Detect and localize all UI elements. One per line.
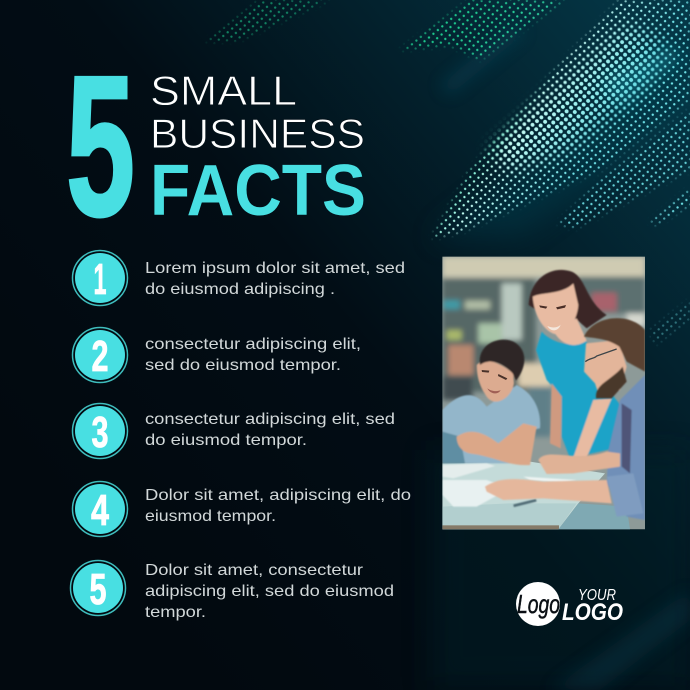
fact 3: do eiusmod tempor.	[145, 432, 307, 449]
office backdrop	[442, 257, 645, 529]
papers and laptop	[443, 463, 577, 507]
glasses	[585, 349, 617, 362]
fact 3	[72, 404, 395, 458]
fact 1: Lorem ipsum dolor sit amet, sed	[145, 260, 405, 277]
logo: LOGO	[562, 599, 623, 626]
woman's face details	[539, 305, 566, 330]
fact 4	[72, 482, 411, 536]
title	[66, 35, 366, 258]
fact 5: Dolor sit amet, consectetur	[145, 562, 364, 579]
halftone dot pattern	[205, 0, 690, 346]
fact 3: 3	[92, 408, 108, 457]
fact 5: 5	[90, 565, 106, 614]
heading: small business: SMALL	[150, 67, 297, 114]
fact 2	[72, 328, 361, 382]
title: BUSINESS	[150, 110, 365, 157]
fact 2: 2	[92, 332, 108, 381]
logo	[516, 582, 623, 626]
left man's face details	[482, 370, 507, 393]
logo badge	[516, 582, 560, 626]
fact 4: Dolor sit amet, adipiscing elit, do	[145, 487, 411, 504]
fact 2: consectetur adipiscing elit,	[145, 336, 361, 353]
table	[442, 462, 605, 529]
big numeral 5: 5	[66, 35, 135, 258]
fact 1: do eiusmod adipiscing .	[145, 281, 335, 298]
woman in blue	[529, 270, 622, 458]
photo: three colleagues at a table	[442, 257, 645, 529]
fact 3: consectetur adipiscing elit, sed	[145, 411, 395, 428]
fact 4: eiusmod tempor.	[145, 508, 276, 525]
fact 4: 4	[91, 486, 109, 535]
logo wordmark: YOUR	[578, 587, 616, 604]
fact 5: tempor.	[145, 604, 206, 621]
fact 1	[72, 250, 405, 306]
fact 2: sed do eiusmod tempor.	[145, 357, 341, 374]
man in grey-blue tee	[442, 340, 540, 465]
fact 5: adipiscing elit, sed do eiusmod	[145, 583, 394, 600]
man with glasses	[485, 318, 645, 520]
fact 5	[70, 560, 394, 621]
logo: Logo	[517, 589, 560, 619]
fact 1: 1	[94, 255, 106, 304]
heading: facts: FACTS	[150, 151, 366, 231]
